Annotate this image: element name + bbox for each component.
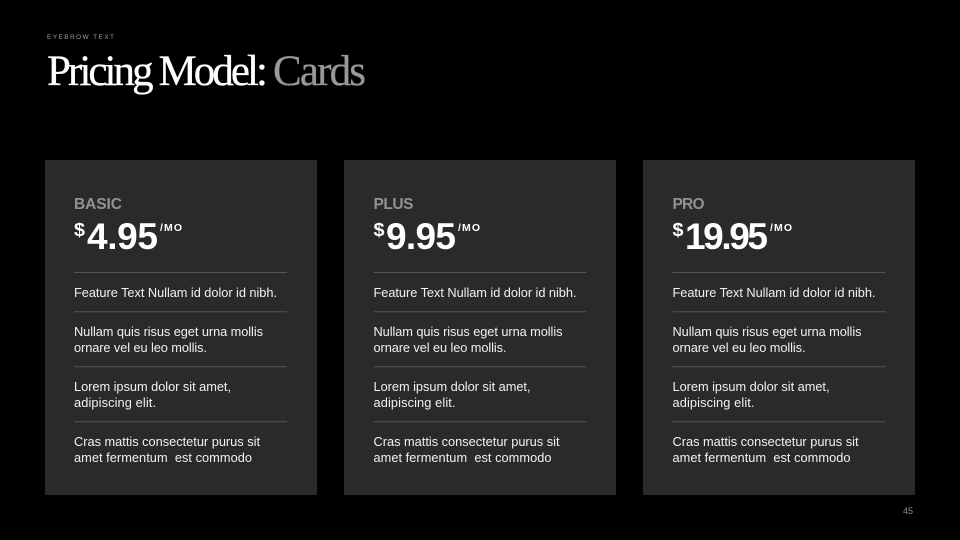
price: pro: $ (672, 220, 684, 240)
eyebrow text: EYEBROW TEXT (47, 34, 114, 41)
feature list: plus: Cras mattis consectetur purus sit (374, 434, 560, 449)
price: plus: /MO (458, 222, 480, 234)
feature list: basic: Feature Text Nullam id dolor id nibh. (74, 285, 277, 300)
feature list: basic: amet fermentum est commodo (74, 450, 252, 465)
panel: plus pricing card (344, 160, 616, 495)
tier name: plus: PLUS (374, 196, 414, 213)
feature list: basic: adipiscing elit. (74, 395, 156, 410)
price: pro: 19.95 (685, 216, 768, 257)
title: Pricing Model: (47, 48, 268, 95)
feature list: pro: Nullam quis risus eget urna mollis (672, 324, 862, 339)
feature list: pro: Cras mattis consectetur purus sit (672, 434, 859, 449)
price: plus (374, 216, 480, 257)
feature list: pro (672, 285, 876, 465)
price: basic (74, 216, 182, 257)
price: basic: $ (74, 220, 85, 240)
feature list: pro: Lorem ipsum dolor sit amet, (672, 379, 830, 394)
feature list: basic: Lorem ipsum dolor sit amet, (74, 379, 231, 394)
page number: 45 (903, 506, 913, 516)
feature list: plus: Lorem ipsum dolor sit amet, (374, 379, 530, 394)
feature list: basic: Nullam quis risus eget urna mollis (74, 324, 263, 339)
panel: basic pricing card (45, 160, 317, 495)
price: pro (672, 216, 792, 257)
price: pro: /MO (770, 222, 792, 234)
feature list: pro: amet fermentum est commodo (672, 450, 850, 465)
feature list: plus (374, 285, 576, 465)
tier name: basic: BASIC (74, 196, 122, 213)
feature list: pro: Feature Text Nullam id dolor id nibh. (672, 285, 876, 300)
feature list: pro: ornare vel eu leo mollis. (672, 340, 806, 355)
feature list: basic (74, 285, 277, 465)
price: plus: $ (374, 220, 384, 240)
price: plus: 9.95 (386, 216, 456, 257)
title: Cards (273, 48, 366, 95)
panel: pro pricing card (643, 160, 915, 495)
feature list: plus: ornare vel eu leo mollis. (374, 340, 506, 355)
feature list: plus: Nullam quis risus eget urna mollis (374, 324, 562, 339)
feature list: pro: adipiscing elit. (672, 395, 754, 410)
price: basic: 4.95 (87, 216, 158, 257)
feature list: basic: ornare vel eu leo mollis. (74, 340, 207, 355)
tier name: pro: PRO (672, 196, 704, 213)
feature list: plus: amet fermentum est commodo (374, 450, 552, 465)
feature list: plus: Feature Text Nullam id dolor id nibh. (374, 285, 576, 300)
feature list: basic: Cras mattis consectetur purus sit (74, 434, 260, 449)
feature list: plus: adipiscing elit. (374, 395, 456, 410)
price: basic: /MO (160, 222, 182, 234)
title (47, 48, 366, 95)
